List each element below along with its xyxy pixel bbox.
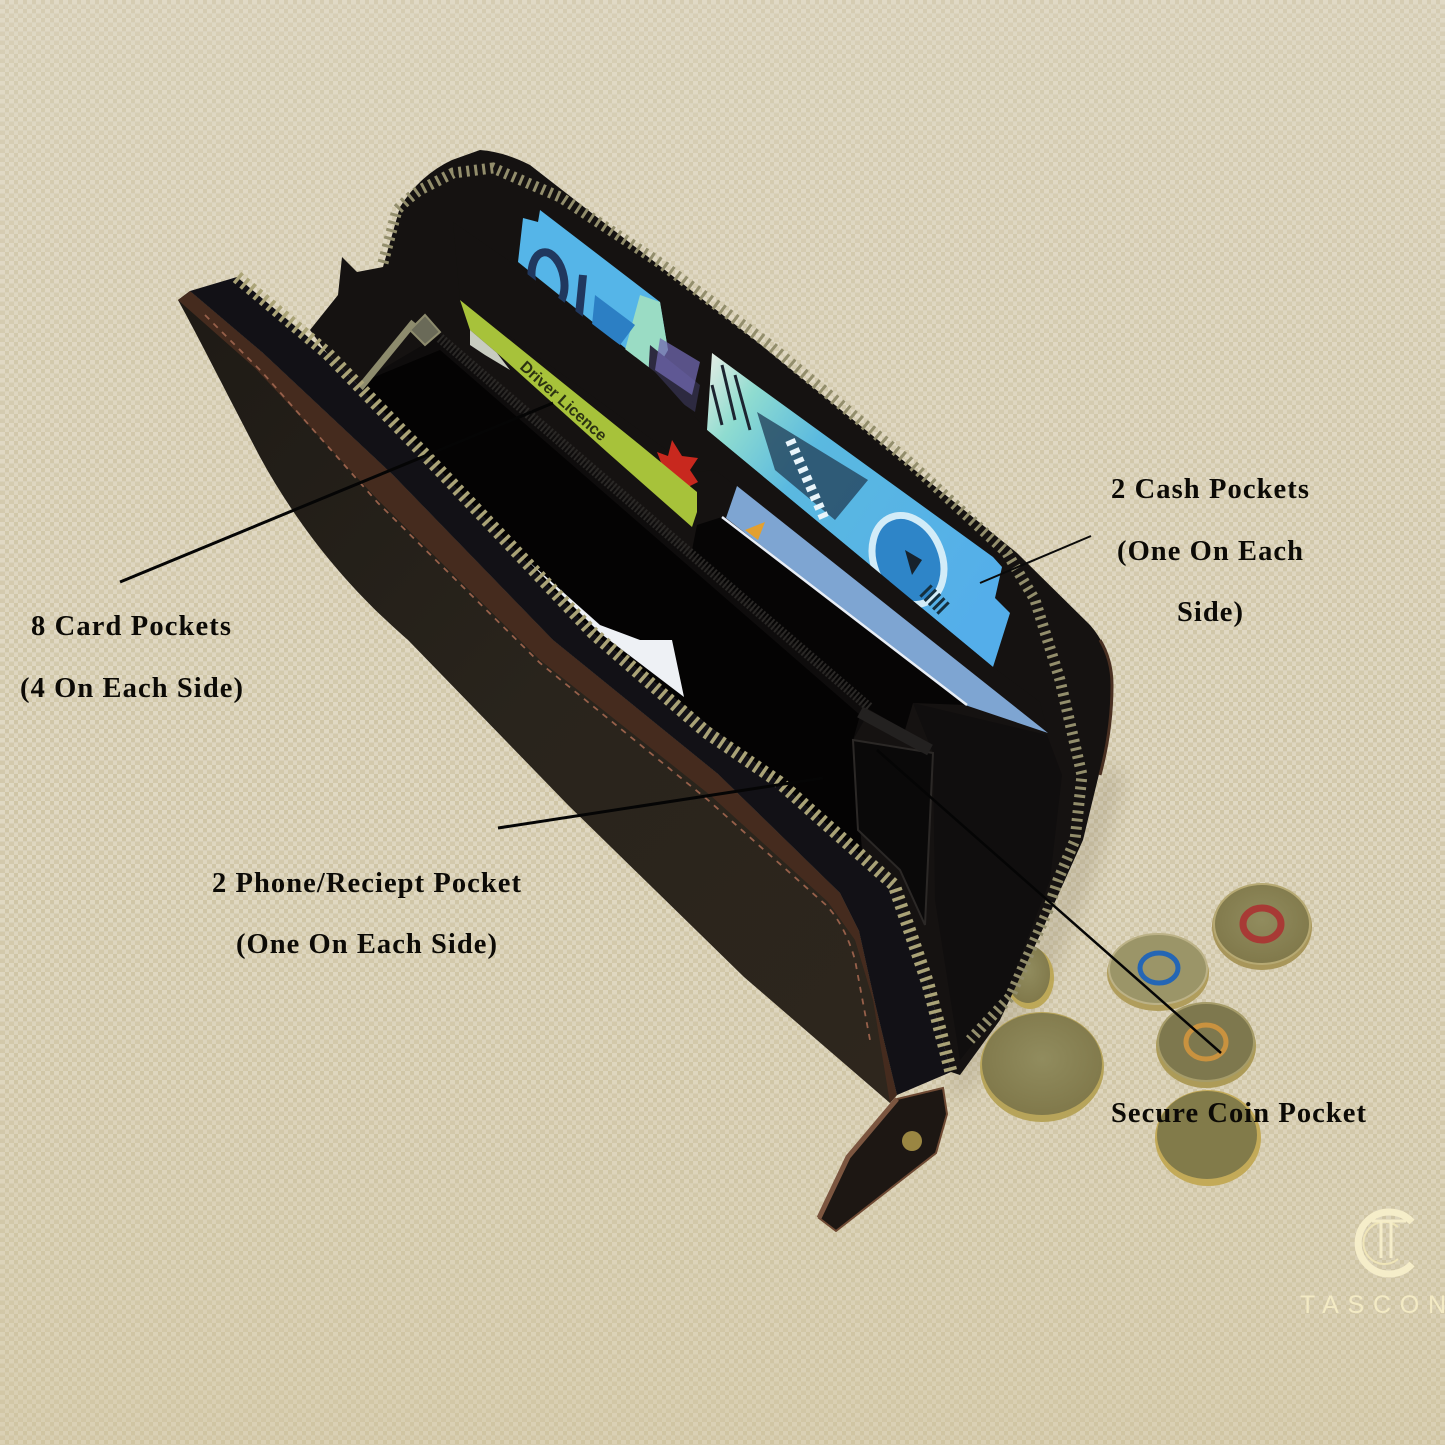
coin: bottom	[1155, 1090, 1261, 1186]
zipper tape	[190, 277, 951, 1095]
callout line: cash pockets	[980, 536, 1091, 583]
brand logo: TASCON	[1300, 1291, 1445, 1319]
front zipper teeth	[237, 277, 951, 1072]
label: card pockets: (4 On Each Side)	[20, 673, 243, 704]
label: cash pockets: Side)	[1177, 597, 1243, 628]
coin: large	[980, 1012, 1104, 1122]
label: coin pocket: Secure Coin Pocket	[1111, 1098, 1366, 1129]
back zipper teeth	[383, 168, 1082, 1040]
front compartment	[355, 350, 928, 984]
label: phone pocket: 2 Phone/Reciept Pocket	[212, 868, 522, 899]
card pocket band	[453, 222, 1048, 733]
coin: blue ring	[1107, 934, 1209, 1011]
coin: red ring	[1212, 884, 1312, 970]
maple leaf on card pocket	[657, 440, 698, 487]
callout line: card pockets	[120, 403, 553, 582]
coin pocket gusset	[913, 703, 1062, 1060]
green licence card: Driver Licence	[516, 358, 610, 445]
wallet	[178, 150, 1112, 1231]
label: card pockets	[20, 611, 243, 704]
leather front face	[178, 291, 897, 1103]
coin partly under wallet	[1006, 945, 1054, 1009]
cash note: upper	[518, 210, 668, 372]
blue card	[722, 486, 1048, 733]
zipper leather pull tab	[819, 1088, 947, 1231]
label: phone pocket	[212, 868, 522, 960]
interior panel and zip track	[355, 335, 870, 740]
callout line: coin pocket	[877, 750, 1221, 1053]
wallet soft shadow on fabric	[945, 760, 1125, 1100]
green licence card	[460, 300, 697, 527]
stitching	[205, 315, 870, 1040]
label: cash pockets: 2 Cash Pockets	[1111, 474, 1309, 505]
back tape highlight edge	[1100, 640, 1112, 775]
brown rim	[178, 291, 897, 1103]
label: card pockets: 8 Card Pockets	[31, 611, 231, 642]
cash note: lower	[707, 353, 1010, 667]
label: cash pockets	[1111, 474, 1309, 628]
phone pocket flap	[853, 712, 933, 925]
wallet interior body	[310, 150, 1112, 1075]
brand logo	[1300, 1212, 1445, 1319]
black card region	[690, 517, 967, 730]
callout line: phone pocket	[498, 778, 823, 828]
coin: orange ring	[1156, 1003, 1256, 1088]
zipper pull	[360, 315, 440, 388]
hologram patch	[648, 345, 700, 412]
label: phone pocket: (One On Each Side)	[236, 929, 497, 960]
receipt paper	[527, 560, 684, 697]
label: cash pockets: (One On Each	[1117, 536, 1303, 567]
